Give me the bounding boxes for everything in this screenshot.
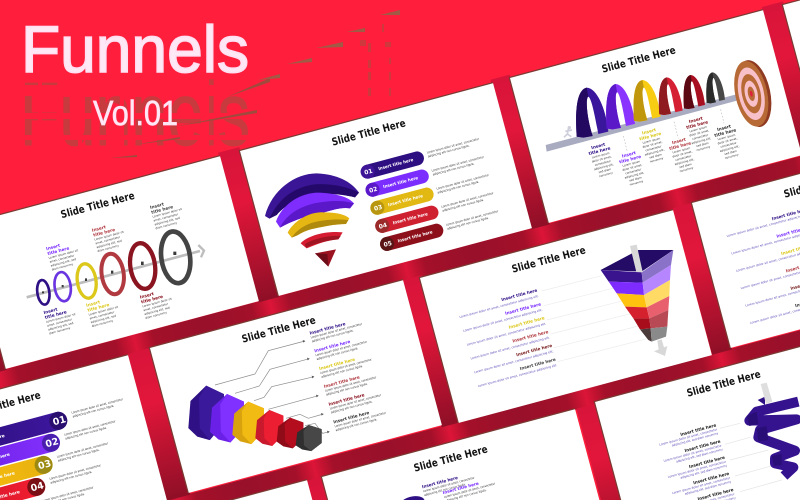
column 1: consectetur (594, 159, 612, 167)
column 3: nonummy (649, 156, 664, 164)
item 1: adipiscing elit non cursus ligula. (424, 482, 466, 497)
row 2: Insert title here (504, 301, 542, 317)
column 2: consectetur (625, 167, 643, 175)
column 3: sed diam (649, 152, 663, 160)
slide heading: Slide Title Here (412, 443, 489, 475)
item 03: adipiscing elit non cursus ligula. (437, 180, 480, 195)
callout: yellow: Lorem ipsum dolor sit (88, 305, 119, 317)
bar 01: 01 (52, 414, 67, 428)
callout: grey (149, 197, 186, 230)
row 1: adipiscing elit, sed diam nonummy (671, 431, 719, 448)
row 1: Lorem ipsum dolor sit amet, consectetur (659, 427, 718, 447)
column 6: Lorem ipsum (717, 133, 736, 141)
item 02: adipiscing elit non cursus ligula. (432, 162, 475, 177)
column 2: adipiscing elit, (624, 171, 645, 180)
callout: yellow (85, 295, 122, 328)
column 5: sed diam (696, 141, 709, 148)
column 2 (617, 149, 648, 188)
item 5: adipiscing elit non cursus ligula. (330, 399, 373, 414)
item 1: Insert title here (309, 321, 346, 337)
callout: dark red: Lorem ipsum dolor sit (142, 296, 173, 308)
row 3: Insert title here (508, 315, 545, 331)
item 6: adipiscing elit non cursus ligula. (335, 417, 378, 432)
row 3: Lorem ipsum dolor sit amet, consectetur (667, 459, 727, 479)
item 04: Lorem ipsum dolor sit amet, consectetur (441, 191, 495, 209)
callout: grey: amet, consectetur (153, 212, 180, 223)
row 1: Insert title here (501, 288, 538, 303)
bar 03: 03 (37, 458, 53, 472)
callout: red: amet, consectetur (95, 235, 121, 245)
panel: slide bottom centre (321, 408, 614, 500)
panel: slide right list (691, 134, 800, 348)
callout: red: adipiscing elit, sed (96, 239, 122, 249)
item 05: Lorem ipsum dolor sit amet, consectetur (446, 209, 499, 227)
column 3: Lorem ipsum (642, 136, 661, 145)
row 6: Lorem ipsum dolor sit amet, consectetur adipiscing elit. (477, 363, 558, 388)
ghost reflection of the title and slivers (0, 10, 400, 165)
item 3: Lorem ipsum dolor sit amet, consectetur (320, 357, 373, 375)
column 4: Insert (671, 137, 687, 146)
funnel of arcs (265, 173, 359, 267)
column 4: Lorem ipsum (672, 146, 691, 154)
callout: navy: title here (44, 309, 68, 321)
callout: dark red: diam nonummy (145, 310, 168, 320)
item 1: Lorem ipsum dolor sit amet, consectetur (310, 322, 363, 339)
slide heading: Slide Title Here (600, 44, 677, 76)
column 3: consectetur (645, 144, 663, 152)
callout: navy: Lorem ipsum dolor sit (46, 312, 77, 324)
column 4: title here (669, 140, 692, 152)
callout: navy: diam nonummy (49, 326, 71, 335)
callout: dark red: amet, consectetur (143, 302, 169, 312)
row 4: adipiscing elit, sed diam nonummy (684, 480, 732, 496)
ghost reflection of the title and slivers: Funnels (20, 65, 250, 165)
row 3: Insert title here (688, 455, 726, 470)
bar 03: adipiscing elit non cursus ligula. (57, 448, 100, 463)
row 4: Insert title here (512, 329, 549, 344)
item 02: Lorem ipsum dolor sit amet, consectetur (431, 155, 485, 173)
item 1: Lorem ipsum dolor sit amet, consectetur (423, 475, 476, 493)
callout: purple: Insert (45, 243, 61, 252)
spiral ribbon (720, 383, 798, 492)
column 6: Insert (716, 124, 732, 133)
item 3 (318, 352, 374, 379)
column 6: nonummy (724, 152, 739, 160)
callout: purple: adipiscing elit, sed (50, 257, 77, 268)
panel: slide hexagons (149, 279, 442, 493)
callout: yellow: adipiscing elit, sed (90, 314, 117, 324)
item 2: Lorem ipsum dolor sit amet, consectetur (443, 481, 496, 499)
column 3: adipiscing elit, (644, 148, 665, 157)
row 6: Insert title here (519, 357, 557, 372)
column 5: title here (686, 119, 709, 131)
column 1: nonummy (598, 171, 614, 178)
row 2: Insert title here (684, 439, 721, 454)
column 2: title here (619, 154, 642, 165)
item 6 (333, 406, 388, 432)
ring chart (27, 230, 204, 305)
panel: slide 11 offscreen corner (53, 479, 346, 500)
item 2: Insert title here (314, 339, 351, 354)
column 3: Insert (641, 127, 657, 137)
column 2: sed diam (629, 175, 642, 183)
column 5: dolor sit amet, (689, 128, 710, 137)
callout: grey: title here (151, 204, 174, 216)
item 6: Lorem ipsum dolor sit amet, consectetur (334, 411, 387, 428)
item 01 (359, 135, 482, 180)
column 3 (637, 126, 668, 165)
column 6: title here (714, 127, 737, 139)
column 4: consectetur (675, 154, 693, 162)
callout: grey: adipiscing elit, sed (154, 216, 180, 226)
bar 04: 04 (30, 480, 46, 494)
column 6: dolor sit amet, (717, 136, 738, 145)
item 03: 03 (373, 204, 383, 213)
column 4: nonummy (679, 166, 694, 173)
bar 02: adipiscing elit non cursus ligula. (65, 426, 107, 441)
callout: dark red: title here (140, 294, 164, 305)
item 5: Lorem ipsum dolor sit amet, consectetur (329, 393, 382, 411)
row 5 (675, 487, 737, 500)
bar 01 (0, 394, 127, 460)
item 2: Insert title here (442, 481, 480, 496)
item 04: 04 (378, 222, 388, 231)
callout: grey: diam nonummy (155, 221, 178, 230)
column 1: dolor sit amet, (591, 154, 612, 164)
panel: slide spiral (594, 333, 800, 500)
bar 03: Lorem ipsum dolor sit amet, consectetur (56, 441, 109, 459)
item 03: Insert title here (387, 193, 424, 208)
column 6: adipiscing elit, (719, 144, 740, 153)
title: Funnels: Funnels (21, 12, 249, 86)
callout: dark red: adipiscing elit, sed (144, 305, 170, 316)
column 5 (684, 115, 715, 153)
item 4: adipiscing elit non cursus ligula. (326, 382, 368, 397)
callout: purple: amet, consectetur (49, 253, 76, 264)
subtitle: Vol.01: Vol.01 (93, 94, 178, 133)
column 3: dolor sit amet, (642, 140, 663, 149)
row 5: Lorem ipsum dolor sit amet, consectetur adipiscing elit. (474, 349, 554, 374)
item 04: adipiscing elit non cursus ligula. (442, 198, 484, 213)
item 5 (328, 388, 383, 414)
row 2: Lorem ipsum dolor sit amet, consectetur adipiscing elit. (463, 308, 543, 333)
column 1 (587, 141, 617, 179)
column 1: title here (588, 145, 611, 157)
row 4: Insert title here (693, 471, 730, 486)
hexagon funnel with leader lines (188, 340, 330, 451)
item 01: 01 (364, 168, 373, 177)
callout: yellow: amet, consectetur (89, 310, 116, 320)
bar 02: 02 (44, 436, 60, 450)
pyramid funnel (542, 245, 673, 362)
callout: grey: Lorem ipsum dolor sit (152, 207, 183, 219)
callout: navy: amet, consectetur (47, 317, 73, 328)
column 5: adipiscing elit, (691, 136, 712, 145)
column 1: adipiscing elit, (593, 162, 614, 171)
row 4: Lorem ipsum dolor sit amet, consectetur (672, 476, 731, 495)
column 4: sed diam (679, 162, 692, 169)
callout: yellow: diam nonummy (91, 318, 114, 328)
panel: slide 4 offscreen corner (782, 0, 800, 150)
item 6: Insert title here (333, 410, 370, 425)
column 2: dolor sit amet, (622, 163, 643, 172)
panel: slide arcs (234, 82, 532, 297)
callout: purple: title here (47, 245, 70, 257)
callout: red (91, 220, 128, 253)
item 1: adipiscing elit non cursus ligula. (311, 328, 354, 343)
callout: navy: adipiscing elit, sed (48, 321, 74, 332)
row 1 (657, 422, 720, 451)
callout: purple (45, 238, 82, 272)
callout: yellow: Insert (85, 299, 101, 309)
item 01: Insert title here (378, 157, 414, 172)
slide heading: Slide Title Here (330, 117, 407, 149)
item 01: adipiscing elit non cursus ligula. (427, 144, 470, 159)
bar 05 (0, 483, 97, 500)
slide heading: Slide Title Here (685, 368, 762, 400)
item 04: Insert title here (392, 211, 429, 226)
row 2 (662, 438, 724, 467)
item 02: 02 (368, 186, 378, 195)
item 4: Lorem ipsum dolor sit amet, consectetur (325, 375, 377, 393)
slide heading: Slide Title Here (59, 190, 136, 221)
item 05: Insert title here (397, 229, 433, 244)
bar 04: Lorem ipsum dolor sit amet, consectetur (49, 463, 102, 481)
column 6: consectetur (720, 140, 738, 149)
item 4 (323, 370, 378, 397)
callout: purple: diam nonummy (51, 262, 74, 272)
column 6 (712, 122, 743, 161)
callout: purple: Lorem ipsum dolor sit (48, 248, 79, 260)
column 4 (667, 136, 698, 174)
bar 04: adipiscing elit non cursus ligula. (50, 470, 93, 485)
item 04 (374, 189, 497, 234)
callout: grey: Insert (149, 201, 165, 211)
bar 01: Lorem ipsum dolor sit amet, consectetur (71, 397, 124, 415)
callout: red: title here (93, 227, 116, 239)
row 1: Lorem ipsum dolor sit amet, consectetur adipiscing elit. (459, 294, 539, 319)
column 5: nonummy (696, 144, 711, 152)
item 3: adipiscing elit non cursus ligula. (321, 364, 363, 379)
bar 03 (0, 438, 112, 497)
item 05: adipiscing elit non cursus ligula. (447, 216, 489, 231)
bar 02: Lorem ipsum dolor sit amet, consectetur (64, 419, 117, 437)
callout: navy (43, 302, 80, 335)
column 1: Lorem ipsum (591, 151, 610, 159)
column 1: sed diam (598, 167, 612, 174)
callout: dark red: Insert (139, 291, 155, 301)
item 1 (309, 317, 364, 343)
column 5: Lorem ipsum (689, 125, 708, 133)
callout: red: diam nonummy (97, 243, 120, 253)
panel: slide rings (0, 155, 259, 369)
panel: slide numbered bars (0, 354, 167, 500)
item 05: 05 (383, 240, 393, 249)
callout: navy: Insert (43, 307, 58, 316)
slide heading: Slide Title Here (240, 314, 317, 346)
item 03 (369, 171, 492, 216)
row 1: Insert title here (680, 423, 717, 438)
item 2: adipiscing elit non cursus ligula. (316, 346, 359, 361)
panel: slide arches and target (506, 0, 800, 223)
arches and target illustration (546, 57, 777, 152)
row 4 (670, 471, 732, 499)
column 1: Insert (591, 142, 606, 151)
item 05 (378, 207, 502, 252)
column 6: sed diam (724, 149, 738, 156)
row 5: Insert title here (516, 343, 553, 358)
bar 04 (0, 461, 105, 500)
item 2: Lorem ipsum dolor sit amet, consectetur (315, 339, 368, 357)
item 03: Lorem ipsum dolor sit amet, consectetur (436, 173, 490, 191)
row 3: Lorem ipsum dolor sit amet, consectetur adipiscing elit. (466, 322, 547, 347)
panel: slide pyramid funnel (419, 209, 712, 423)
column 2: nonummy (629, 179, 644, 187)
column 3: title here (639, 131, 662, 142)
callout: yellow: title here (87, 302, 110, 314)
item 1: Insert title here (421, 475, 459, 490)
bar 01: adipiscing elit non cursus ligula. (72, 404, 115, 419)
callout: dark red (139, 287, 176, 320)
slide heading: Slide Title Here (510, 244, 587, 276)
column 5: Insert (688, 116, 704, 125)
callout: red: Lorem ipsum dolor sit (94, 230, 125, 241)
column 5: consectetur (692, 132, 710, 141)
bar 02 (0, 416, 119, 479)
item 01: Lorem ipsum dolor sit amet, consectetur (426, 137, 480, 155)
callout: red: Insert (91, 224, 107, 234)
row 2: Lorem ipsum dolor sit amet, consectetur (663, 443, 723, 463)
item 02 (364, 153, 487, 198)
item 1 (421, 471, 477, 497)
column 2: Insert (621, 150, 637, 160)
item 3: Insert title here (318, 357, 356, 372)
row 3 (666, 455, 728, 483)
column 2: Lorem ipsum (622, 159, 641, 168)
item 5: Insert title here (328, 392, 365, 408)
row 3: adipiscing elit, sed diam nonummy (680, 463, 728, 480)
column 4: dolor sit amet, (672, 149, 693, 159)
item 2 (314, 335, 369, 361)
row 2: adipiscing elit, sed diam nonummy (676, 447, 723, 464)
column 4: adipiscing elit, (674, 157, 695, 166)
row 4: Lorem ipsum dolor sit amet, consectetur adipiscing elit. (470, 335, 550, 360)
item 02: Insert title here (383, 175, 419, 190)
item 4: Insert title here (323, 374, 361, 390)
dome shape (398, 493, 426, 500)
